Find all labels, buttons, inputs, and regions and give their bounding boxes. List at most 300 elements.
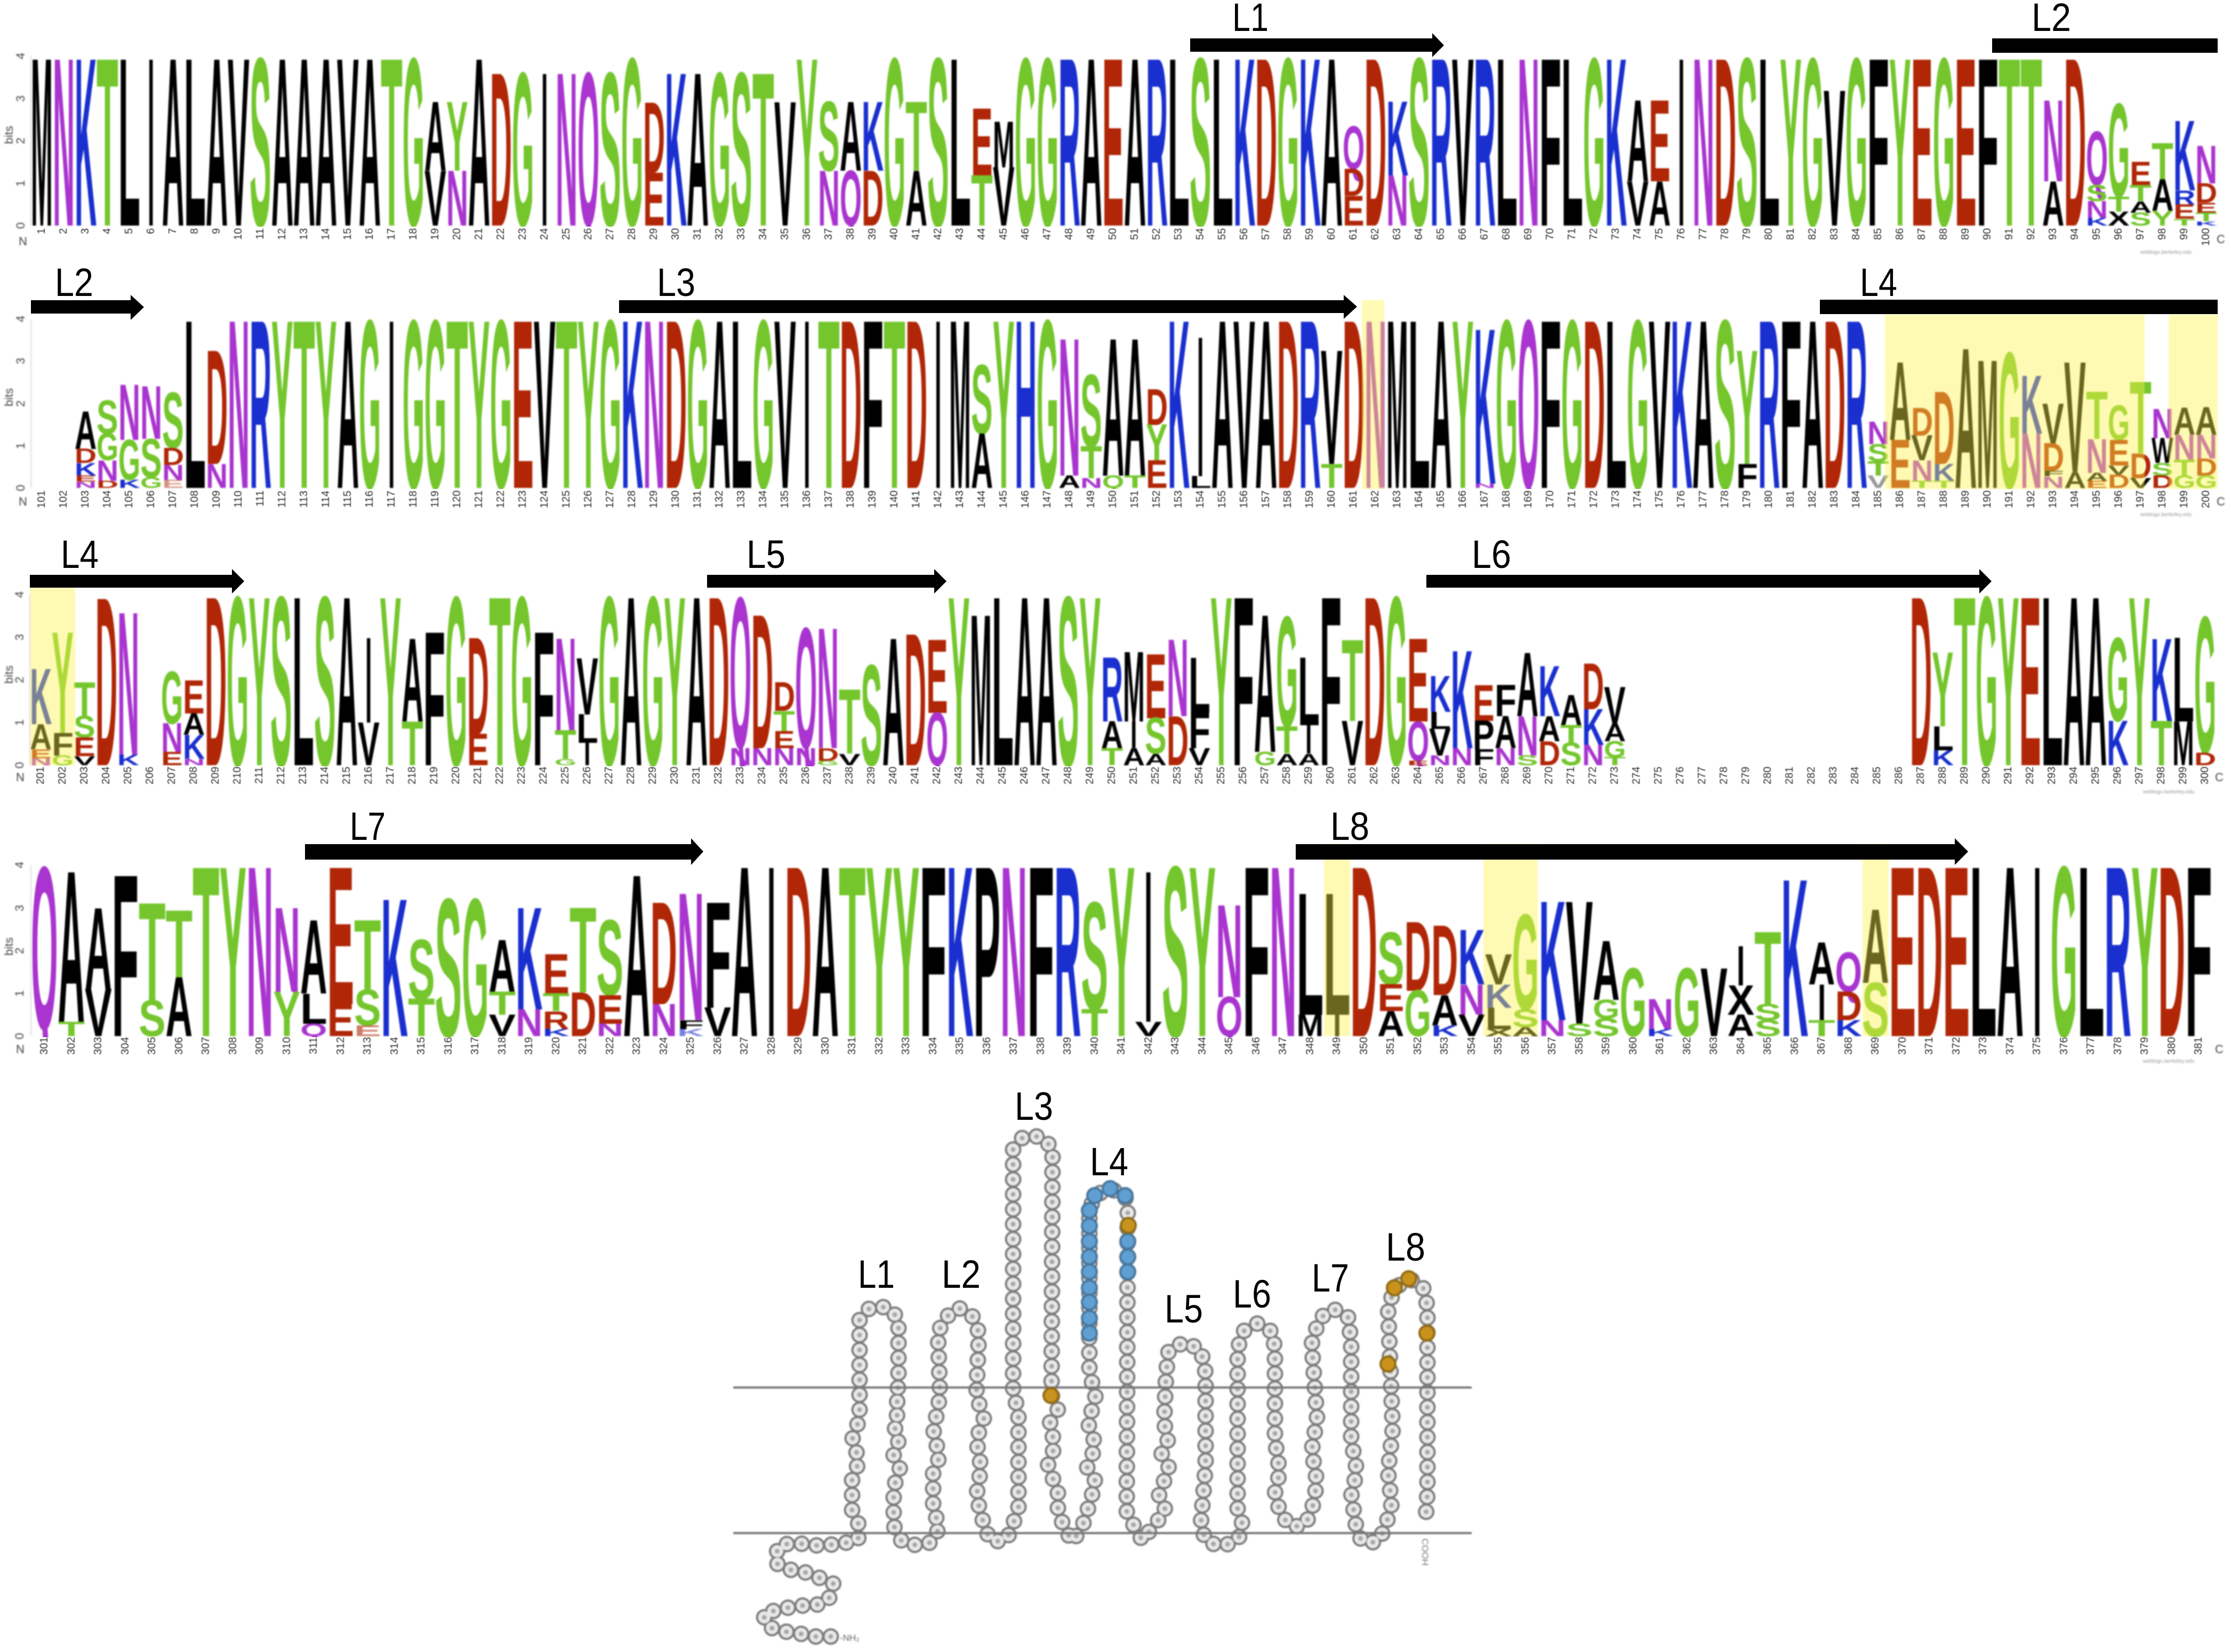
logo row 1 letters: N bbox=[1518, 8, 1539, 277]
logo row 3 letters: F bbox=[1189, 702, 1210, 759]
logo row 4 letters: V bbox=[1485, 944, 1512, 994]
logo row 1 letters: K bbox=[2195, 220, 2218, 227]
logo row 2 letters: D bbox=[1583, 270, 1605, 540]
y axes with bit scale: 1 bbox=[14, 443, 27, 449]
position numbers row 2: 191 bbox=[2003, 491, 2015, 508]
logo row 4 letters: A bbox=[300, 897, 327, 1016]
logo row 4 letters: K bbox=[946, 815, 974, 1088]
logo row 3 letters: Y bbox=[2129, 546, 2150, 817]
logo row 2 letters: N bbox=[1911, 454, 1933, 487]
logo row 2 letters: N bbox=[2086, 429, 2108, 484]
logo row 3 letters: K bbox=[2150, 614, 2172, 747]
position numbers row 1: 80 bbox=[1763, 228, 1775, 240]
position numbers row 1: 21 bbox=[473, 228, 485, 240]
position numbers row 2: 154 bbox=[1194, 491, 1206, 508]
logo row 2 letters: Y bbox=[1736, 316, 1758, 500]
N-terminus label: -NH₂ bbox=[840, 1633, 860, 1643]
bead chain residue marks bbox=[763, 1136, 1427, 1637]
position numbers row 2: 140 bbox=[888, 491, 900, 508]
logo row 3 letters: G bbox=[1976, 546, 1997, 817]
logo row 1 letters: N bbox=[1386, 160, 1408, 242]
position numbers row 3: 230 bbox=[669, 767, 680, 784]
logo row 1 letters: T bbox=[381, 9, 403, 277]
position numbers row 1: 99 bbox=[2178, 228, 2190, 240]
position numbers row 1: 63 bbox=[1391, 228, 1403, 240]
logo row 2 letters: N bbox=[1474, 482, 1496, 490]
position numbers row 3: 233 bbox=[734, 767, 746, 784]
gold highlighted residues bbox=[1044, 1218, 1434, 1403]
position numbers row 2: 144 bbox=[976, 491, 988, 508]
logo row 4 letters: Y bbox=[2131, 815, 2158, 1088]
position numbers row 1: 29 bbox=[648, 228, 660, 240]
logo row 2 letters: D bbox=[2108, 471, 2130, 492]
logo row 4 letters: E bbox=[327, 825, 354, 1046]
logo row 3 letters: A bbox=[1036, 545, 1057, 817]
position numbers row 2: 160 bbox=[1326, 491, 1337, 508]
position numbers row 1: 3 bbox=[79, 228, 91, 234]
logo row 3 letters: F bbox=[533, 592, 555, 807]
logo row 4 letters: F bbox=[112, 825, 139, 1086]
logo row 3 letters: D bbox=[1582, 650, 1604, 724]
logo row 1 letters: X bbox=[2108, 207, 2130, 230]
logo row 1 letters: L bbox=[1496, 9, 1518, 277]
logo row 4 letters: M bbox=[1297, 1008, 1323, 1043]
logo row 4 letters: T bbox=[1081, 1001, 1108, 1045]
logo row 4 letters: S bbox=[1162, 815, 1189, 1088]
logo row 3 letters: G bbox=[227, 546, 248, 817]
logo row 2 letters: M bbox=[949, 270, 971, 540]
logo row 1 letters: R bbox=[1058, 8, 1080, 277]
position numbers row 2: 111 bbox=[254, 491, 266, 507]
logo row 1 letters: A bbox=[1321, 8, 1343, 277]
logo row 4 letters: S bbox=[354, 979, 381, 1037]
logo row 2 letters: S bbox=[140, 428, 162, 490]
logo row 1 letters: G bbox=[1583, 9, 1605, 277]
position numbers row 1: 46 bbox=[1020, 228, 1031, 240]
logo row 1 letters: Q bbox=[840, 154, 862, 243]
position numbers row 4: 320 bbox=[550, 1037, 562, 1055]
logo row 3 letters: T bbox=[1276, 718, 1298, 762]
y axes with bit scale: bits bbox=[2, 388, 15, 406]
logo row 2 letters: R bbox=[1845, 270, 1867, 540]
y axes with bit scale: 4 bbox=[13, 862, 26, 868]
logo row 1 letters: M bbox=[31, 8, 53, 277]
position numbers row 3: 202 bbox=[57, 767, 68, 784]
logo row 4 letters: T bbox=[569, 881, 597, 1019]
logo row 2 letters: G bbox=[1627, 270, 1649, 540]
logo row 1 letters: N bbox=[818, 154, 840, 243]
logo row 2 letters: K bbox=[75, 460, 97, 479]
logo row 4 letters: K bbox=[1431, 1023, 1458, 1039]
y axes with bit scale: 3 bbox=[13, 905, 26, 911]
logo row 2 letters: V bbox=[2042, 391, 2064, 456]
position numbers row 1: 13 bbox=[298, 228, 310, 240]
y axes with bit scale: 3 bbox=[14, 95, 27, 102]
position numbers row 1: 52 bbox=[1151, 228, 1162, 240]
logo row 3 letters: S bbox=[1516, 752, 1538, 768]
position numbers row 2: 172 bbox=[1588, 491, 1600, 508]
logo row 4 letters: T bbox=[543, 989, 569, 1017]
position numbers row 2: 161 bbox=[1347, 491, 1359, 508]
logo row 2 letters: A bbox=[1211, 270, 1233, 540]
position numbers row 1: 33 bbox=[735, 228, 747, 240]
position numbers row 4: 370 bbox=[1896, 1037, 1908, 1055]
position numbers row 4: 302 bbox=[65, 1037, 77, 1055]
position numbers row 3: 282 bbox=[1805, 767, 1817, 784]
logo row 3 letters: G bbox=[2194, 575, 2216, 795]
logo row 1 letters: E bbox=[1911, 8, 1933, 277]
position numbers row 1: 68 bbox=[1500, 228, 1512, 240]
position numbers row 3: 256 bbox=[1237, 767, 1249, 784]
logo row 4 letters: D bbox=[1835, 982, 1862, 1029]
topology label L7: L7 bbox=[1312, 1256, 1349, 1300]
y axes with bit scale: 3 bbox=[13, 634, 26, 640]
position numbers row 2: 117 bbox=[386, 491, 397, 508]
logo row 3 letters: S bbox=[314, 546, 336, 817]
position numbers row 3: 291 bbox=[2002, 767, 2014, 784]
position numbers row 3: 286 bbox=[1893, 767, 1905, 784]
position numbers row 1: 35 bbox=[779, 228, 791, 240]
logo row 3 letters: A bbox=[1101, 713, 1123, 757]
topology diagram bbox=[733, 1136, 1472, 1643]
topology label L1: L1 bbox=[858, 1252, 895, 1296]
position numbers row 3: 204 bbox=[100, 767, 112, 784]
logo row 3 letters: A bbox=[2063, 545, 2085, 817]
position numbers row 4: 379 bbox=[2139, 1037, 2150, 1055]
logo row 2 letters: N bbox=[643, 270, 665, 540]
logo row 3 letters: L bbox=[992, 546, 1014, 817]
position numbers row 1: 40 bbox=[888, 228, 900, 240]
logo row 2 letters: N bbox=[2042, 473, 2064, 492]
logo row 2 letters: L bbox=[1605, 269, 1627, 540]
logo row 1 letters: V bbox=[1824, 49, 1845, 267]
position numbers row 3: 275 bbox=[1652, 767, 1664, 784]
logo row 3 letters: V bbox=[1429, 721, 1451, 764]
y axes with bit scale: weblogo.berkeley.edu bbox=[2140, 250, 2192, 255]
position numbers row 3: 251 bbox=[1128, 767, 1139, 784]
position numbers row 3: 247 bbox=[1040, 767, 1052, 784]
logo row 3 letters: A bbox=[1538, 709, 1560, 749]
logo row 1 letters: N bbox=[2042, 76, 2064, 207]
logo row 4 letters: L bbox=[300, 984, 327, 1033]
position numbers row 3: 245 bbox=[997, 767, 1008, 784]
position numbers row 4: 363 bbox=[1708, 1037, 1720, 1055]
bead chain outer ring bbox=[763, 1136, 1427, 1637]
logo row 2 letters: A bbox=[971, 416, 993, 505]
logo row 4 letters: P bbox=[974, 815, 1000, 1088]
logo row 3 letters: T bbox=[555, 721, 576, 768]
position numbers row 2: 143 bbox=[954, 491, 966, 508]
logo row 2 letters: F bbox=[2042, 469, 2064, 478]
position numbers row 3: 253 bbox=[1171, 767, 1183, 784]
position numbers row 4 bbox=[38, 1037, 2204, 1055]
position numbers row 4: 322 bbox=[604, 1037, 615, 1055]
logo row 3 letters: E bbox=[1407, 613, 1429, 747]
logo row 2 letters: V bbox=[2064, 328, 2086, 506]
logo row 4 letters: A bbox=[488, 924, 516, 1008]
position numbers row 1: 25 bbox=[560, 228, 572, 240]
logo row 2 letters: T bbox=[1867, 456, 1889, 480]
position numbers row 4: 378 bbox=[2112, 1037, 2123, 1055]
logo row 3 letters: G bbox=[445, 546, 467, 817]
logo row 2 letters: A bbox=[2086, 471, 2108, 484]
logo row 1 letters: A bbox=[905, 154, 927, 243]
logo row 4 letters: Y bbox=[866, 815, 893, 1088]
logo row 2 letters: K bbox=[2020, 358, 2042, 452]
logo row 1 letters: K bbox=[1605, 8, 1627, 277]
position numbers row 4: 337 bbox=[1008, 1037, 1020, 1055]
y axes with bit scale: 1 bbox=[14, 180, 27, 187]
logo row 3 letters: A bbox=[1254, 574, 1276, 795]
y axes with bit scale: bits bbox=[2, 126, 15, 144]
logo row 1 letters: A bbox=[424, 81, 446, 193]
position numbers row 4: 330 bbox=[819, 1037, 831, 1055]
logo row 4 letters: N bbox=[1216, 877, 1243, 1025]
position numbers row 1: 95 bbox=[2091, 228, 2102, 240]
position numbers row 2: 131 bbox=[692, 491, 703, 508]
logo row 3 letters: M bbox=[1123, 631, 1145, 743]
logo row 2 letters: S bbox=[162, 376, 184, 466]
logo row 2 letters: N bbox=[118, 368, 140, 458]
logo row 4 letters: S bbox=[435, 857, 462, 1078]
logo row 4 letters: Y bbox=[893, 815, 920, 1088]
position numbers row 2: 183 bbox=[1828, 491, 1840, 508]
position numbers row 2: 109 bbox=[211, 491, 222, 508]
logo row 1 letters: F bbox=[1867, 9, 1889, 277]
position numbers row 2: 142 bbox=[932, 491, 944, 508]
logo row 1 letters: E bbox=[971, 87, 993, 196]
logo row 1 letters: E bbox=[1649, 76, 1671, 207]
logo row 2 letters: F bbox=[1539, 269, 1561, 540]
position numbers row 3: 236 bbox=[800, 767, 812, 784]
logo row 1 letters: A bbox=[271, 8, 293, 277]
logo row 4 letters: L bbox=[1323, 856, 1351, 1052]
logo row 1 letters: G bbox=[1845, 9, 1867, 277]
logo row 2 letters: D bbox=[2042, 436, 2064, 480]
logo row 4 letters: N bbox=[1458, 976, 1485, 1024]
position numbers row 3: 241 bbox=[909, 767, 921, 784]
logo row 4 letters: G bbox=[2051, 816, 2077, 1088]
position numbers row 4: 356 bbox=[1520, 1037, 1531, 1055]
logo row 4 letters: K bbox=[1647, 1027, 1674, 1038]
arrow: L3 bbox=[619, 295, 1357, 319]
position numbers row 3: 299 bbox=[2177, 767, 2189, 784]
position numbers row 3: 269 bbox=[1521, 767, 1533, 784]
logo row 2 letters: N bbox=[162, 460, 184, 485]
position numbers row 1: 75 bbox=[1654, 228, 1665, 240]
logo row 4 letters: A bbox=[85, 883, 112, 1014]
logo row 3 letters: G bbox=[598, 546, 620, 817]
logo row 1 letters: D bbox=[490, 27, 512, 272]
logo row 3 letters: N bbox=[161, 715, 183, 761]
logo row 1 letters: G bbox=[1037, 9, 1058, 277]
y axes with bit scale bbox=[2, 53, 2225, 1064]
logo row 3 letters: D bbox=[95, 548, 117, 817]
logo row 4 letters: F bbox=[1242, 815, 1270, 1088]
logo row 2 letters: S bbox=[1714, 270, 1736, 540]
position numbers row 2: 121 bbox=[473, 491, 485, 508]
y axes with bit scale: weblogo.berkeley.edu bbox=[2140, 512, 2192, 518]
yellow highlights over logo columns bbox=[30, 300, 2218, 1036]
logo row 4 letters: S bbox=[1593, 1013, 1620, 1042]
logo row 2 letters: E bbox=[1889, 424, 1911, 503]
logo row 3 letters: L bbox=[2172, 612, 2194, 748]
position numbers row 1: 18 bbox=[407, 228, 419, 240]
logo row 1 letters: D bbox=[1255, 8, 1277, 277]
logo row 4 letters: I bbox=[767, 816, 775, 1088]
logo row 4 letters: G bbox=[1620, 948, 1647, 1057]
position numbers row 1: 54 bbox=[1194, 228, 1206, 240]
position numbers row 1 bbox=[36, 228, 2212, 246]
logo row 4 letters: G bbox=[1673, 948, 1700, 1057]
logo row 4 letters: N bbox=[1000, 815, 1028, 1088]
logo row 1 letters: K bbox=[1386, 79, 1408, 199]
position numbers row 2: 101 bbox=[36, 491, 47, 508]
logo row 3 letters: T bbox=[1342, 615, 1363, 746]
logo row 2 letters: V bbox=[2130, 475, 2152, 491]
logo row 2 letters: A bbox=[1255, 270, 1277, 540]
logo row 3 letters: Y bbox=[1932, 630, 1954, 749]
logo row 3 letters: Y bbox=[52, 602, 74, 765]
logo row 2 letters: N bbox=[228, 270, 250, 540]
logo row 3 letters: S bbox=[1145, 708, 1167, 765]
logo row 2 letters: G bbox=[1561, 270, 1583, 540]
position numbers row 2: 119 bbox=[429, 491, 441, 508]
logo row 1 letters: Y bbox=[796, 8, 818, 277]
logo row 3 letters: L bbox=[1932, 719, 1954, 758]
position numbers row 2: 173 bbox=[1610, 491, 1622, 508]
logo row 1 letters: E bbox=[2130, 155, 2152, 193]
logo row 2 letters: Q bbox=[1102, 472, 1124, 492]
logo row 3 letters: A bbox=[1298, 750, 1320, 769]
logo row 4 letters: N bbox=[246, 815, 274, 1088]
position numbers row 4: 354 bbox=[1465, 1037, 1477, 1055]
logo row 2 letters: V bbox=[2108, 463, 2130, 477]
arrow: L5 bbox=[707, 569, 946, 594]
logo row 1 letters: G bbox=[1015, 9, 1037, 277]
position numbers row 1: 50 bbox=[1107, 228, 1119, 240]
logo row 3 letters: F bbox=[1320, 546, 1342, 817]
logo row 2 letters: K bbox=[1168, 270, 1190, 540]
position numbers row 2: 195 bbox=[2091, 491, 2102, 508]
logo row 1 letters: T bbox=[97, 9, 118, 277]
position numbers row 1: 65 bbox=[1435, 228, 1447, 240]
logo row 3 letters: A bbox=[183, 708, 205, 742]
position numbers row 2: 162 bbox=[1369, 491, 1381, 508]
logo row 3 letters: G bbox=[817, 759, 839, 767]
y axes with bit scale: bits bbox=[2, 937, 15, 956]
logo row 1 letters: N bbox=[556, 27, 577, 272]
y axes with bit scale: 2 bbox=[13, 677, 26, 683]
logo row 4 letters: A bbox=[1431, 987, 1458, 1035]
logo row 3 letters: I bbox=[1130, 713, 1137, 757]
logo row 2 letters: I bbox=[388, 270, 395, 540]
position numbers row 4: 346 bbox=[1250, 1037, 1262, 1055]
logo row 1 letters: G bbox=[621, 9, 643, 277]
position numbers row 2: 184 bbox=[1850, 491, 1862, 508]
position numbers row 2: 110 bbox=[232, 491, 244, 508]
logo row 3 letters: N bbox=[1582, 738, 1604, 772]
logo row 4 letters: T bbox=[165, 889, 192, 998]
logo row 1 letters: K bbox=[665, 27, 687, 272]
position numbers row 4: 372 bbox=[1951, 1037, 1962, 1055]
position numbers row 3: 293 bbox=[2046, 767, 2058, 784]
position numbers row 2: 130 bbox=[670, 491, 681, 508]
logo row 2 letters: A bbox=[1058, 472, 1080, 492]
logo row 3 letters: E bbox=[74, 732, 95, 762]
logo row 3 letters: D bbox=[1167, 701, 1189, 781]
logo row 3 letters: A bbox=[1014, 545, 1036, 817]
position numbers row 1: 64 bbox=[1413, 228, 1425, 240]
logo row 4 letters: A bbox=[623, 826, 651, 1086]
logo row 2 letters: A bbox=[709, 270, 731, 540]
position numbers row 2: 164 bbox=[1413, 491, 1425, 508]
logo row 3 letters: G bbox=[511, 546, 533, 817]
logo row 1 letters: G bbox=[709, 27, 731, 272]
position numbers row 3: 265 bbox=[1434, 767, 1446, 784]
position numbers row 2: 171 bbox=[1566, 491, 1578, 508]
logo row 4 letters: N bbox=[1647, 990, 1674, 1039]
logo row 2 letters: Q bbox=[1518, 270, 1539, 540]
logo row 3 letters: N bbox=[117, 570, 139, 799]
position numbers row 1: 49 bbox=[1085, 228, 1097, 240]
logo row 2 letters: D bbox=[2195, 453, 2217, 481]
logo row 4 letters: K bbox=[543, 1027, 569, 1038]
logo row 3 letters: Q bbox=[1407, 710, 1429, 773]
logo row 3 letters: L bbox=[1429, 707, 1451, 734]
logo row 3 letters: K bbox=[1932, 745, 1954, 770]
logo row 3 letters: S bbox=[1560, 736, 1582, 772]
bar: L2 row 1 bbox=[1992, 38, 2218, 53]
logo row 4 letters: T bbox=[139, 874, 166, 1031]
logo row 1 letters: R bbox=[1430, 8, 1452, 277]
position numbers row 2: 198 bbox=[2156, 491, 2168, 508]
logo row 1 letters: Q bbox=[577, 27, 599, 272]
logo row 3 letters: V bbox=[1189, 743, 1210, 771]
position numbers row 3: 209 bbox=[210, 767, 221, 784]
position numbers row 4: 367 bbox=[1816, 1037, 1827, 1055]
position numbers row 2: 175 bbox=[1654, 491, 1665, 508]
logo row 2 letters: G bbox=[2108, 395, 2130, 451]
logo row 3 letters: E bbox=[161, 748, 183, 769]
logo row 2 letters: S bbox=[971, 344, 993, 455]
y axes with bit scale: 3 bbox=[14, 358, 27, 364]
position numbers row 3: 238 bbox=[844, 767, 855, 784]
logo row 2 letters: D bbox=[206, 316, 228, 499]
logo row 1 letters: L bbox=[1168, 9, 1190, 277]
position numbers row 4: 339 bbox=[1062, 1037, 1073, 1055]
logo row 4 letters: F bbox=[704, 870, 731, 1040]
logo row 2 letters: Y bbox=[315, 270, 337, 540]
position numbers row 1: 41 bbox=[910, 228, 922, 240]
position numbers row 1: 66 bbox=[1457, 228, 1468, 240]
logo row 4 letters bbox=[31, 864, 2212, 1037]
logo row 3 letters: A bbox=[1145, 750, 1167, 769]
logo row 3 letters: T bbox=[773, 705, 795, 739]
position numbers row 3: 237 bbox=[822, 767, 833, 784]
logo row 2 letters: I bbox=[804, 270, 810, 540]
y axes with bit scale: 2 bbox=[14, 400, 27, 407]
position numbers row 4: 347 bbox=[1277, 1037, 1289, 1055]
position numbers row 3: 234 bbox=[756, 767, 768, 784]
position numbers row 3: 295 bbox=[2090, 767, 2101, 784]
position numbers row 1: 6 bbox=[145, 228, 157, 234]
position numbers row 3: 212 bbox=[275, 767, 287, 784]
arrow: L4 row 3 bbox=[30, 569, 244, 594]
logo row 3 letters: N bbox=[30, 756, 52, 767]
logo row 3 letters: T bbox=[1560, 720, 1582, 749]
position numbers row 4: 328 bbox=[766, 1037, 777, 1055]
